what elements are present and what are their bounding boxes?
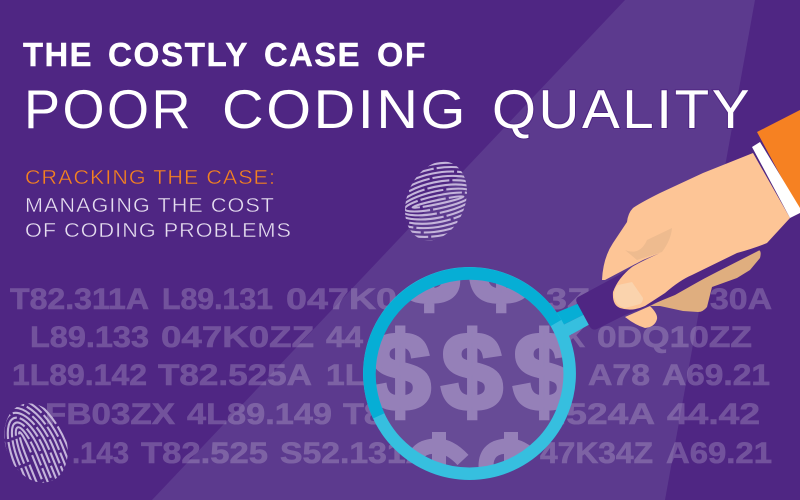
title: poor coding quality: CODING <box>222 78 468 140</box>
sleeve <box>757 110 800 212</box>
background code text: A69.21 <box>662 359 770 392</box>
background code text <box>10 283 772 470</box>
subtitle: managing the cost <box>25 194 292 242</box>
background code text: T82.525 <box>141 437 268 470</box>
magnifying glass lens with dollars <box>376 280 564 468</box>
magnifying glass lens with dollars: $ <box>398 204 460 327</box>
spotlight beam <box>152 0 755 500</box>
background code text: 1L8 <box>326 359 384 392</box>
background code text: 44 <box>326 321 363 354</box>
background code text: 047K0 <box>286 283 397 316</box>
background code text: 44.42 <box>667 398 760 431</box>
background code text: FB03ZX <box>45 398 175 431</box>
title: poor coding quality: POOR <box>24 78 193 140</box>
thumb nail <box>614 282 643 308</box>
background code text: L89.133 <box>30 321 149 354</box>
background code text: 047K0ZZ <box>161 321 314 354</box>
hand holding magnifier <box>576 110 800 330</box>
subtitle: managing the cost: MANAGING THE COST <box>25 194 275 217</box>
title: the costly case of: COSTLY <box>108 36 249 73</box>
background code text: S52.131A <box>280 437 430 470</box>
hand and thumb <box>602 153 790 310</box>
title: poor coding quality: QUALITY <box>492 78 752 140</box>
background code text: K <box>565 321 585 354</box>
magnifying glass lens with dollars: $ <box>441 311 503 434</box>
title: the costly case of <box>23 36 427 73</box>
magnifying glass lens with dollars: $ <box>513 311 575 434</box>
subtitle: managing the cost: OF CODING PROBLEMS <box>25 219 292 242</box>
background code text: T8 <box>343 398 383 431</box>
background code text: 47K34Z <box>540 437 653 470</box>
background code text: 3Z <box>546 283 590 316</box>
background code text: .143 <box>72 437 129 470</box>
background code text: L89.131 <box>162 283 273 316</box>
background code text: 30A <box>710 283 772 316</box>
magnifying glass lens with dollars: $ <box>369 311 431 434</box>
title: the costly case of: CASE <box>264 36 361 73</box>
title: the costly case of: THE <box>23 36 93 73</box>
background code text: A78 <box>588 359 650 392</box>
subtitle: cracking the case: CRACKING THE CASE: <box>25 166 276 189</box>
magnifier neck <box>553 302 592 338</box>
background code text: T82.311A <box>10 283 149 316</box>
magnifier ring <box>369 273 570 474</box>
title: poor coding quality <box>24 78 752 140</box>
icon: fingerprint top <box>405 162 467 240</box>
title: the costly case of: OF <box>377 36 427 73</box>
background code text: 4L89.149 <box>187 398 332 431</box>
background code text: T82.525A <box>158 359 312 392</box>
background code text: 1L89.142 <box>12 359 147 392</box>
background code text: A69.21 <box>666 437 772 470</box>
fingers behind handle <box>650 250 761 312</box>
background code text: .524A <box>556 398 655 431</box>
background code text: 0DQ10ZZ <box>597 321 752 354</box>
magnifying glass lens with dollars: $ <box>470 204 532 327</box>
hand shadow <box>625 228 672 260</box>
magnifier handle <box>576 250 760 330</box>
icon: fingerprint bottom left <box>4 403 68 483</box>
cuff <box>752 142 800 218</box>
